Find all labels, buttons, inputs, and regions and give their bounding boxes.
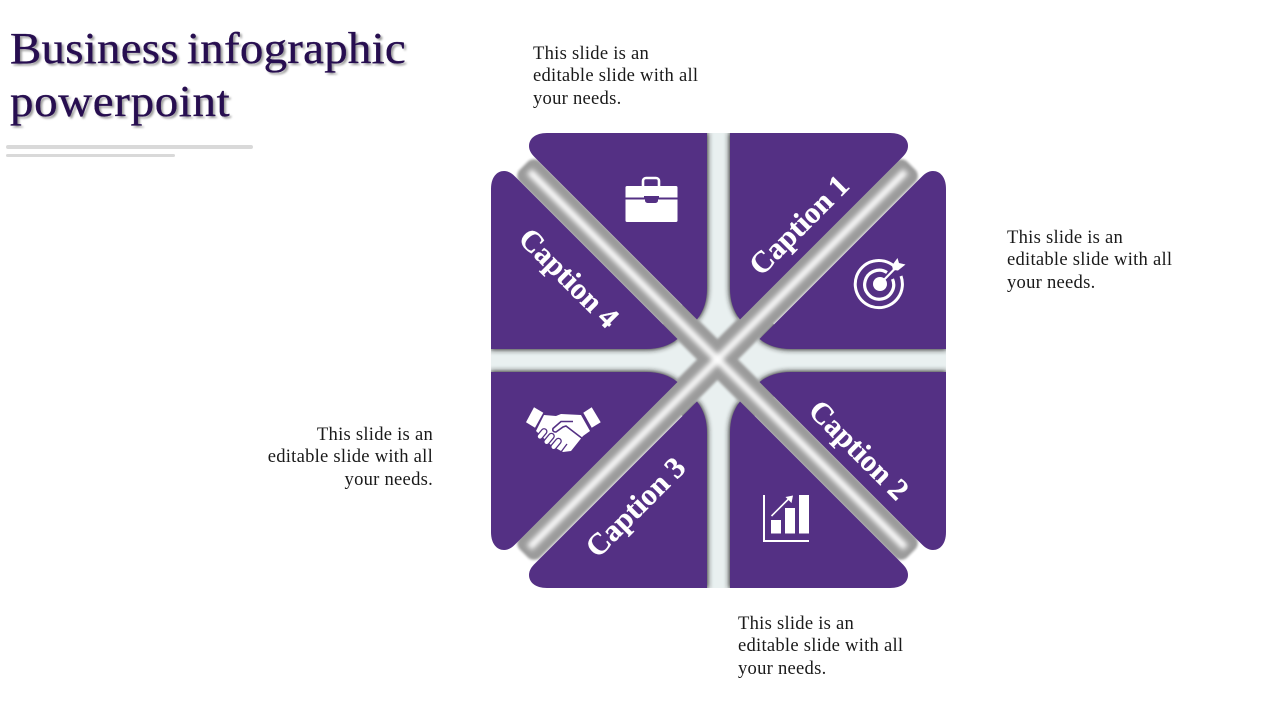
title (10, 24, 408, 129)
text block: left: your needs. (345, 469, 433, 490)
caption 1: Caption 1 (742, 168, 856, 282)
text block: left (268, 424, 433, 490)
text block: bottom: your needs. (738, 658, 826, 679)
caption 4: Caption 4 (512, 221, 626, 335)
text block: right: your needs. (1007, 272, 1095, 293)
text block: right: editable slide with all (1007, 249, 1172, 270)
diagonal silver bands (513, 155, 922, 564)
text block: top (533, 43, 698, 109)
text block: bottom: editable slide with all (738, 635, 903, 656)
text block: bottom (738, 613, 903, 679)
caption 3: Caption 3 (579, 450, 692, 564)
icon: briefcase (626, 178, 678, 222)
text block: left: This slide is an (317, 424, 433, 445)
icon: bar chart (763, 495, 809, 542)
text block: right (1007, 227, 1172, 293)
icon: handshake (526, 407, 601, 452)
text block: top: your needs. (533, 88, 621, 109)
icon: target (855, 258, 906, 308)
purple segments (491, 133, 946, 588)
light cross channels (488, 130, 948, 590)
square diagram (491, 133, 946, 588)
title underline rules (6, 145, 253, 157)
text block: bottom: This slide is an (738, 613, 854, 634)
text block: top: editable slide with all (533, 65, 698, 86)
text block: top: This slide is an (533, 43, 649, 64)
title: Business infographic (10, 24, 406, 72)
caption 2: Caption 2 (802, 393, 916, 507)
title: powerpoint (10, 77, 230, 126)
text block: right: This slide is an (1007, 227, 1123, 248)
text block: left: editable slide with all (268, 446, 433, 467)
